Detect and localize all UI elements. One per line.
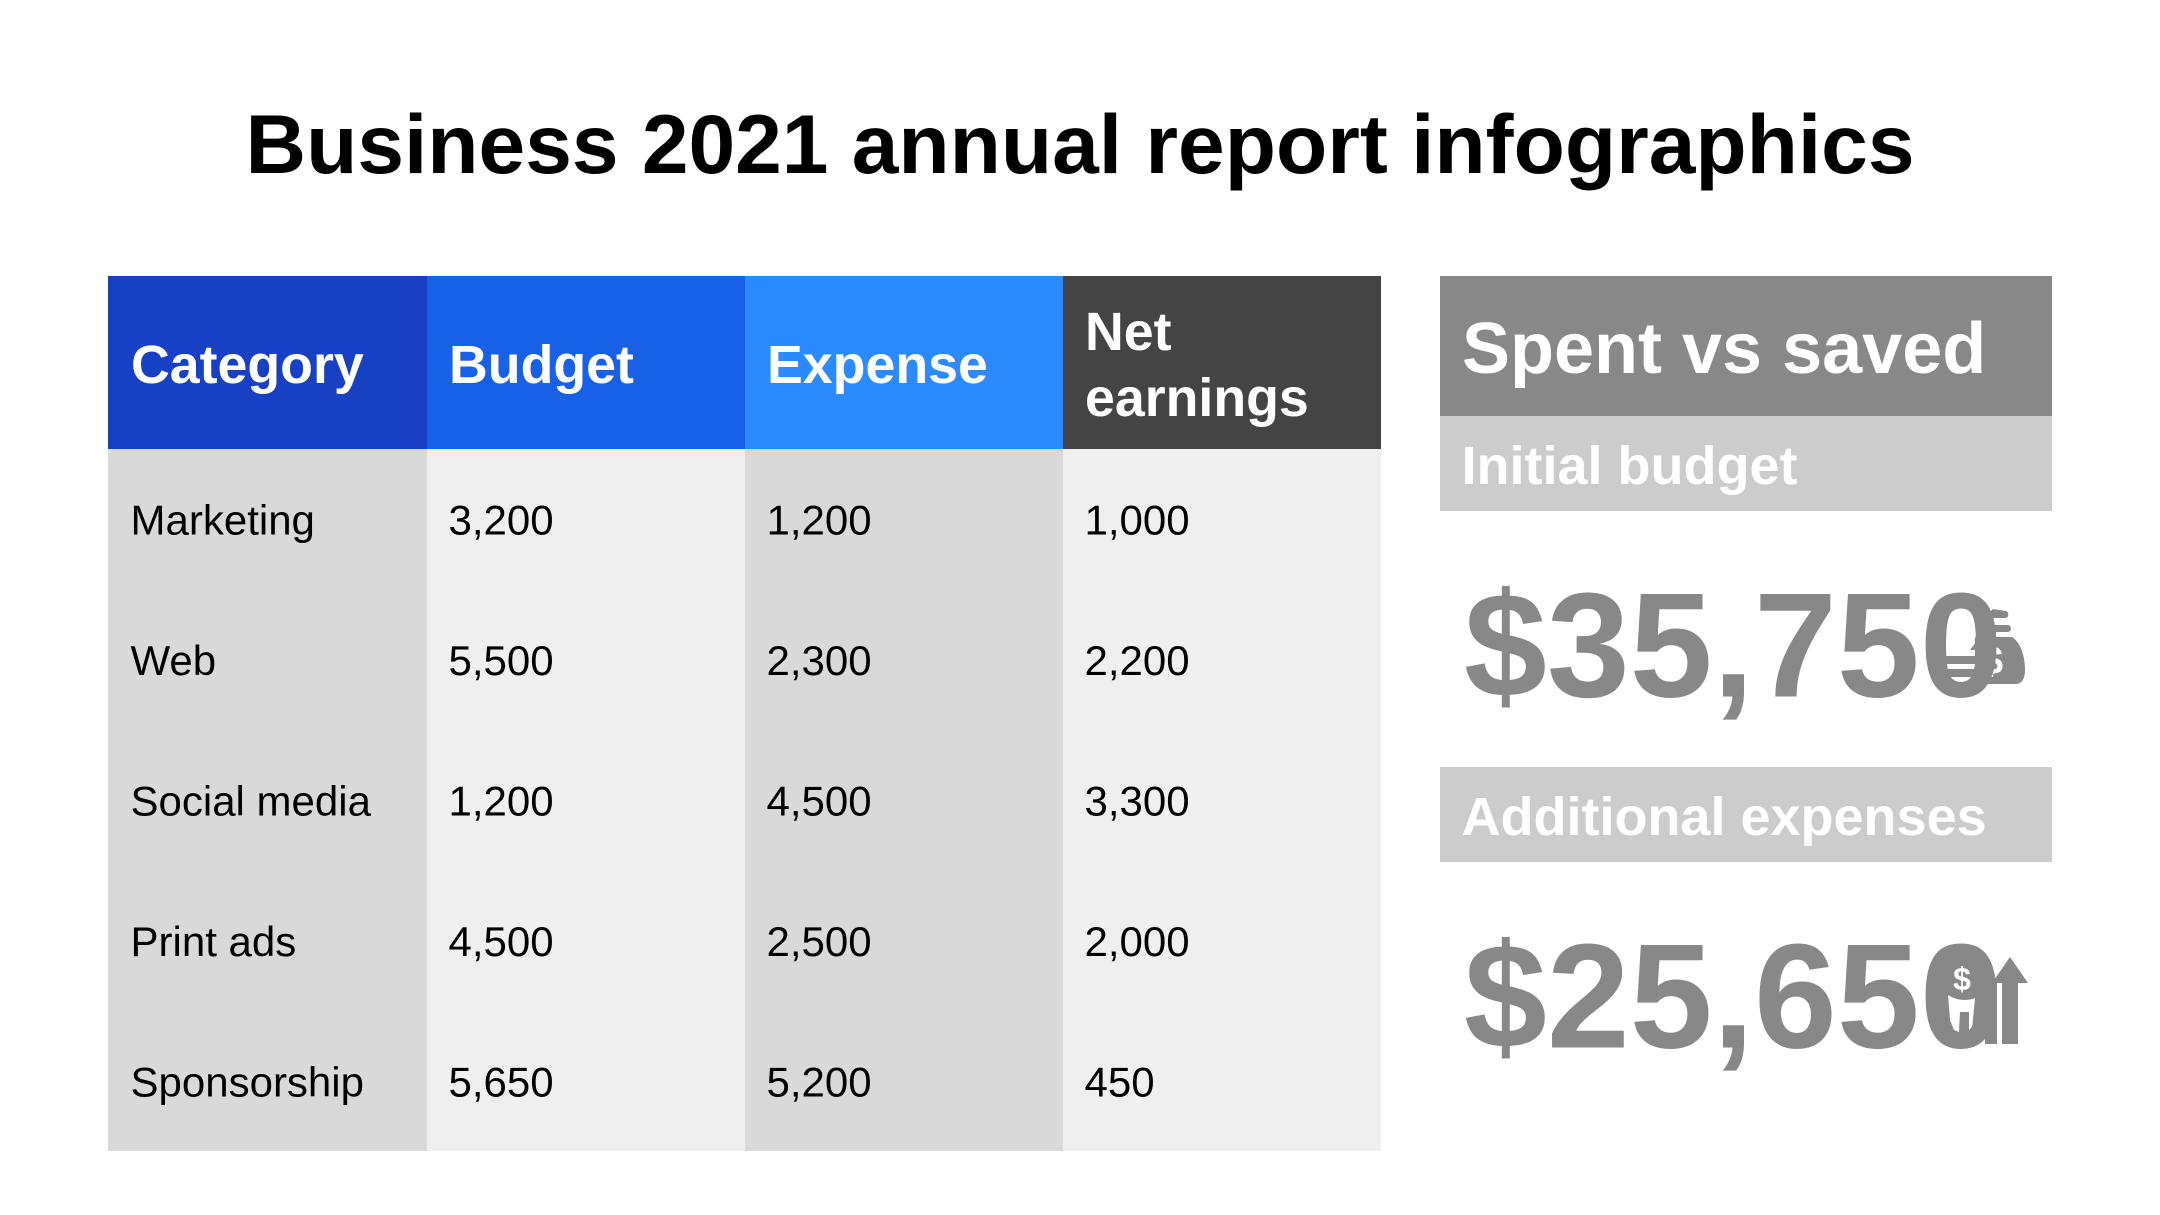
row: Print ads: 2,000 xyxy=(1084,918,1190,965)
panel: spent vs saved xyxy=(1440,276,2052,1080)
row: Sponsorship: Sponsorship xyxy=(130,1058,364,1106)
row: Marketing xyxy=(130,496,1190,544)
header: Budget: Budget xyxy=(449,335,634,395)
row: Marketing: 3,200 xyxy=(448,496,554,544)
header: Expense xyxy=(745,276,1063,449)
heading: Spent vs saved xyxy=(1440,276,2052,416)
title: Business 2021 annual report infographics xyxy=(246,97,1914,191)
row: Marketing: 1,200 xyxy=(766,496,872,544)
heading: Spent vs saved: Spent vs saved xyxy=(1462,309,1986,389)
row: Print ads: 4,500 xyxy=(448,918,554,965)
number: additional expenses: $25,650 xyxy=(1464,912,2003,1080)
header: Net earnings: Net xyxy=(1085,302,1172,362)
row: Web: 2,200 xyxy=(1084,637,1190,684)
icon: money and rising arrow: $ xyxy=(1953,961,1971,997)
row: Social media: Social media xyxy=(130,778,372,824)
header: Expense: Expense xyxy=(767,335,988,395)
subheading: Additional expenses xyxy=(1440,767,2052,862)
row: Sponsorship: 5,200 xyxy=(766,1058,872,1106)
icon: money bag: $ xyxy=(1981,639,2003,683)
header: Budget xyxy=(427,276,745,449)
header: Category xyxy=(108,276,427,449)
subheading: Initial budget: Initial budget xyxy=(1462,436,1797,496)
header: Net earnings xyxy=(1063,276,1381,449)
row: Marketing: Marketing xyxy=(130,496,315,544)
row: Social media xyxy=(130,778,1190,824)
row: Web: 5,500 xyxy=(448,637,554,684)
row: Sponsorship: 5,650 xyxy=(448,1058,554,1106)
row: Web xyxy=(130,637,1190,684)
subheading: Additional expenses: Additional expenses xyxy=(1462,787,1987,847)
row: Social media: 4,500 xyxy=(766,778,872,824)
row: Marketing: 1,000 xyxy=(1084,496,1190,544)
row: Web: 2,300 xyxy=(766,637,872,684)
panel: budget table xyxy=(108,276,1381,1151)
row: Social media: 3,300 xyxy=(1084,778,1190,824)
icon: money bag xyxy=(1946,609,2025,684)
number: initial budget: $35,750 xyxy=(1464,562,2003,728)
row: Print ads: Print ads xyxy=(130,918,296,965)
icon: money and rising arrow xyxy=(1944,952,2028,1044)
header: Category: Category xyxy=(131,335,364,395)
row: Social media: 1,200 xyxy=(448,778,554,824)
row: Web: Web xyxy=(130,637,216,684)
subheading: Initial budget xyxy=(1440,416,2052,511)
row: Sponsorship: 450 xyxy=(1084,1058,1155,1106)
row: Print ads: 2,500 xyxy=(766,918,872,965)
row: Print ads xyxy=(130,918,1190,965)
table column backgrounds xyxy=(108,449,1381,1151)
header: Net earnings: earnings xyxy=(1085,368,1309,428)
row: Sponsorship xyxy=(130,1058,1155,1106)
